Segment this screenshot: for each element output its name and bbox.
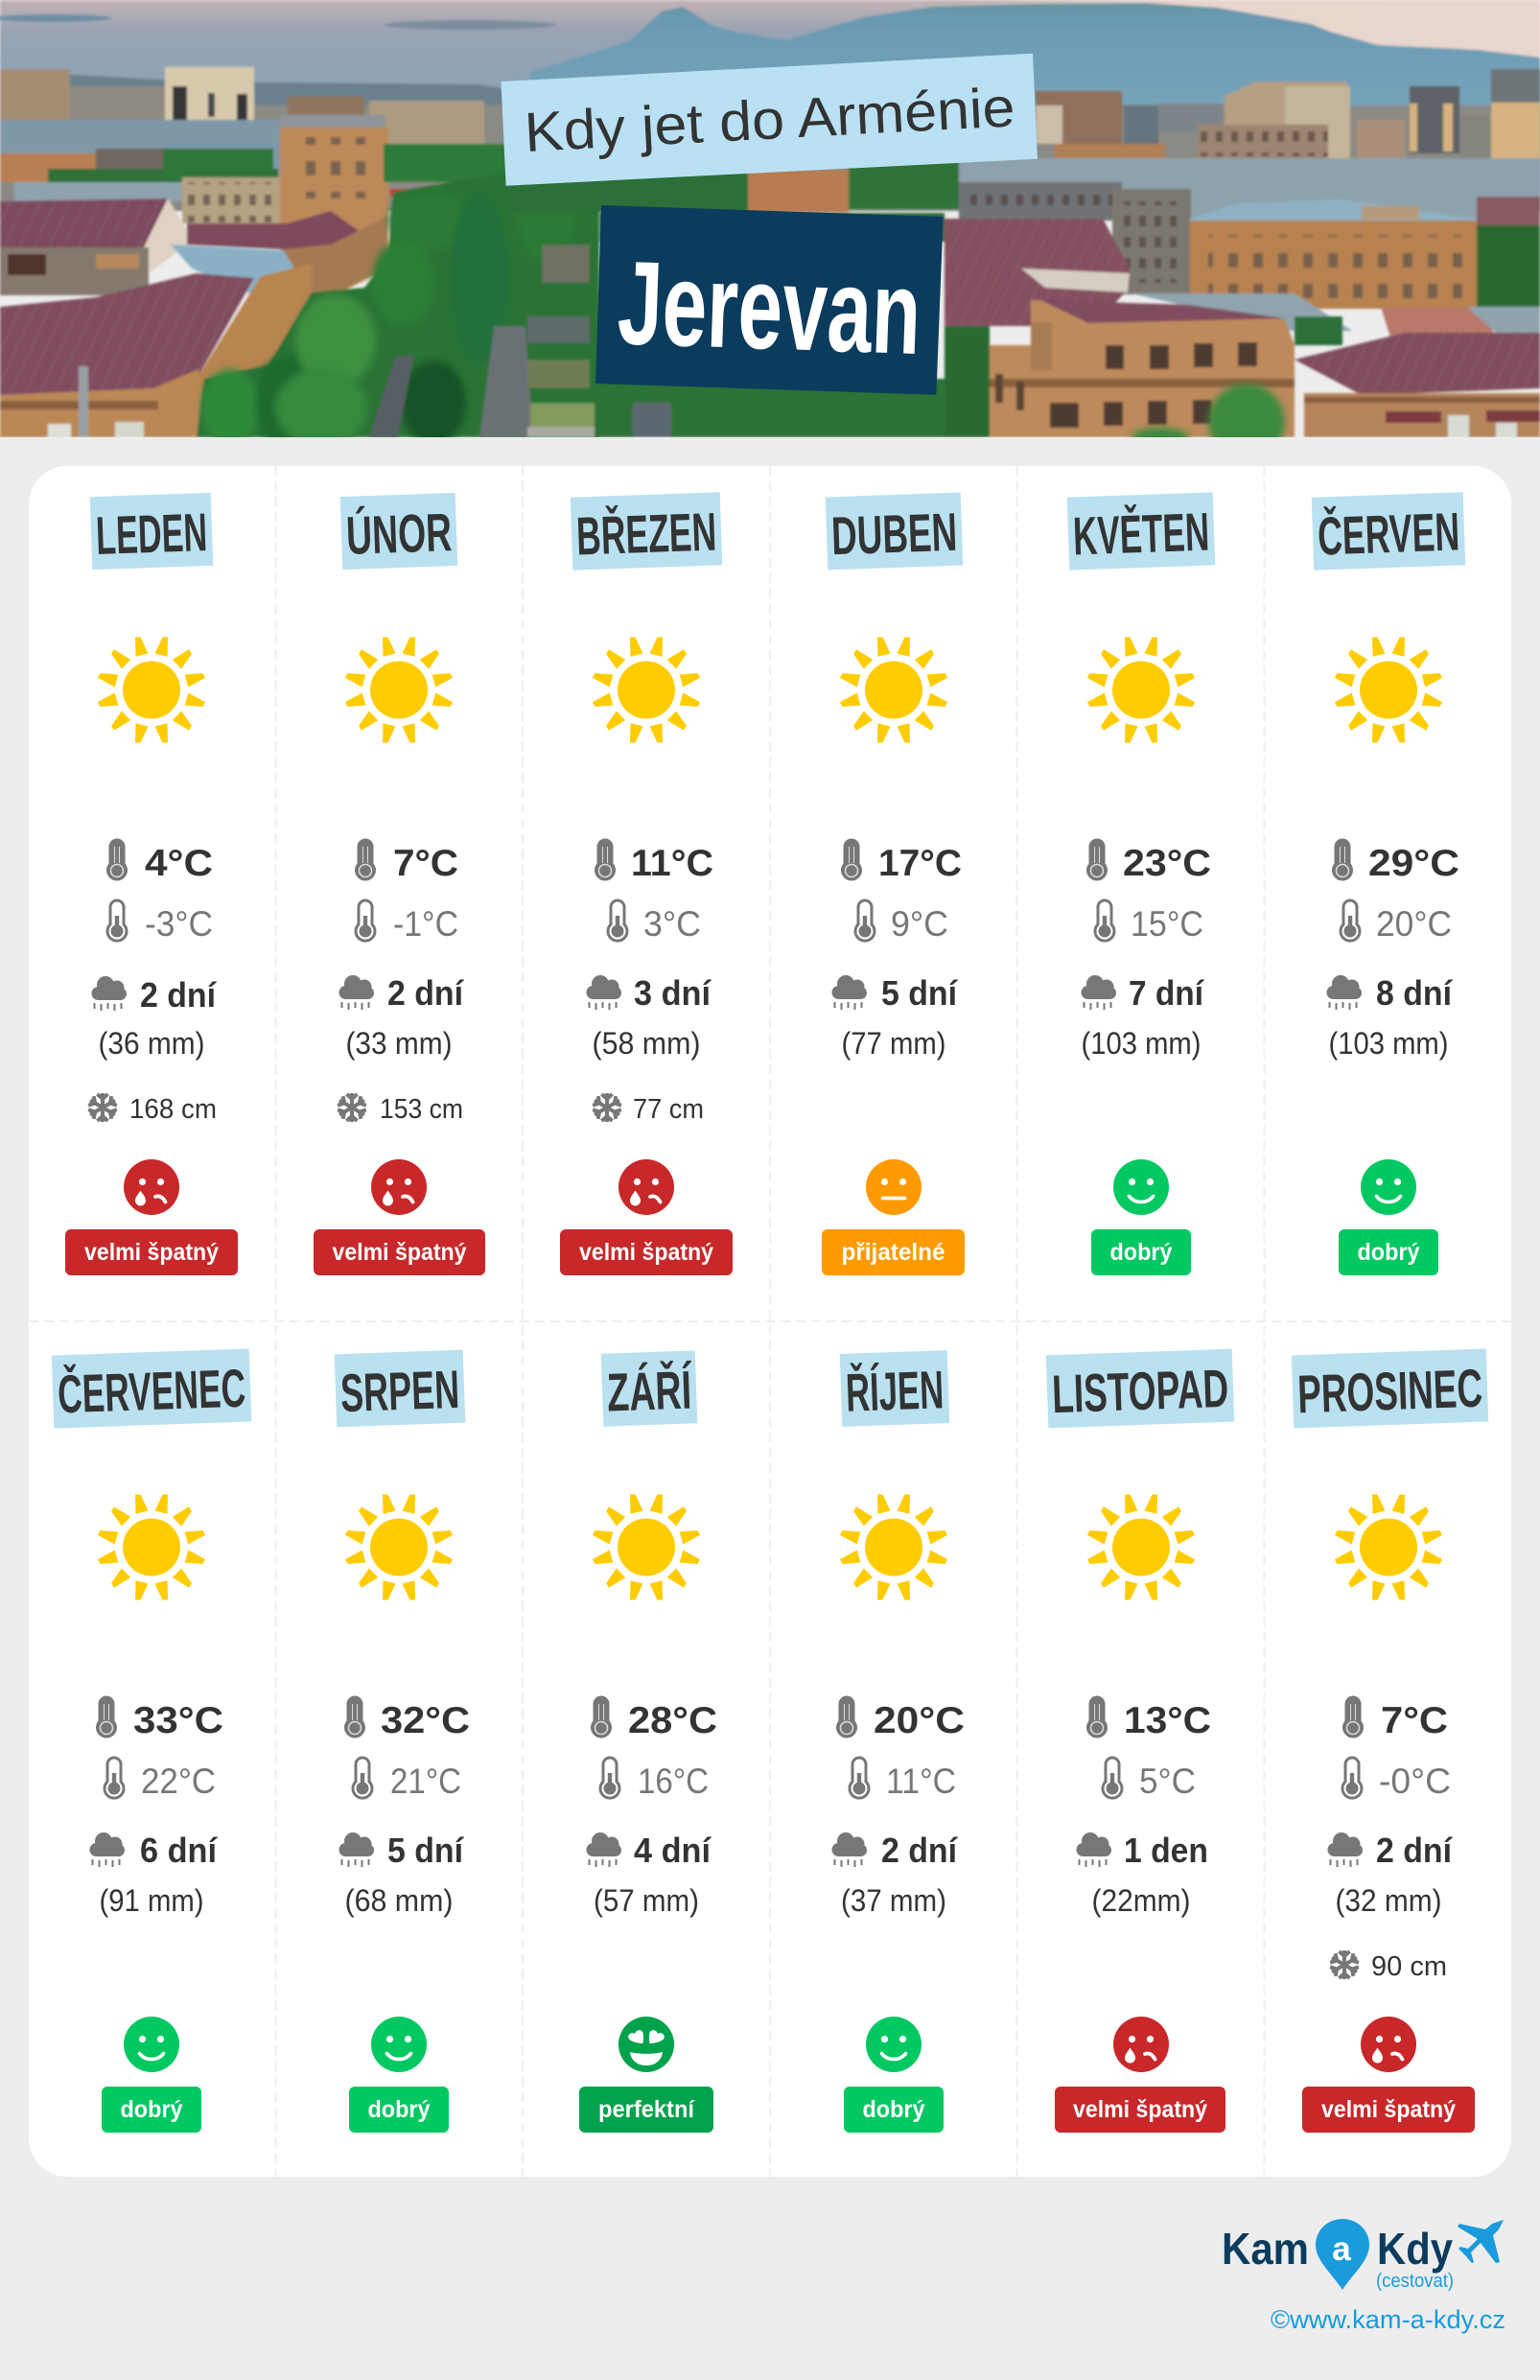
icon: rain cloud (1076, 1832, 1111, 1867)
rain days: 3 dní (634, 973, 712, 1013)
icon: thermometer high (96, 1695, 117, 1738)
rainfall: (103 mm) (1329, 1026, 1448, 1061)
rainfall: (22mm) (1091, 1883, 1191, 1918)
icon: thermometer low (600, 1758, 619, 1798)
rainfall: (57 mm) (594, 1883, 699, 1918)
second row of months (52, 1348, 1488, 2133)
rating face (866, 2017, 922, 2072)
icon: snowflake (592, 1093, 622, 1122)
rain days: 7 dní (1129, 973, 1204, 1013)
heading: LISTOPAD: LISTOPAD (1051, 1358, 1229, 1424)
rainfall: (91 mm) (100, 1883, 203, 1918)
icon: thermometer low (353, 1758, 372, 1798)
rating badge (560, 1229, 733, 1275)
rating badge: přijatelné (842, 1239, 945, 1266)
rating badge (65, 1229, 238, 1275)
month: Únor (314, 493, 485, 1275)
icon: thermometer low (1103, 1758, 1122, 1798)
heading: ÚNOR (340, 493, 457, 570)
rating face (124, 1159, 179, 1215)
low temperature: 16°C (638, 1762, 709, 1801)
month: Listopad (1046, 1349, 1234, 2133)
rain days: 2 dní (1376, 1831, 1453, 1870)
heading: KVĚTEN: KVĚTEN (1072, 502, 1210, 566)
icon: thermometer low (1341, 900, 1360, 941)
heading: DUBEN (826, 493, 963, 570)
icon: rain cloud (1327, 975, 1362, 1010)
icon: thermometer low (105, 1758, 124, 1798)
low temperature: -1°C (393, 904, 458, 944)
icon: sun (98, 637, 205, 742)
rating badge: velmi špatný (1321, 2096, 1456, 2123)
icon: sun (345, 637, 453, 742)
rating badge (1302, 2087, 1475, 2133)
rain days: 1 den (1124, 1831, 1208, 1870)
rating badge: dobrý (121, 2096, 183, 2123)
icon: rain cloud (832, 1832, 867, 1867)
heading: DUBEN: DUBEN (830, 502, 958, 566)
city label: Jerevan (595, 205, 944, 395)
low temperature: -3°C (145, 904, 213, 944)
month: Září (579, 1350, 717, 2133)
heading: ÚNOR: ÚNOR (345, 502, 453, 566)
rating face (1361, 1159, 1416, 1215)
icon: rain cloud (339, 1832, 374, 1867)
rain days: 2 dní (387, 973, 464, 1013)
high temperature: 11°C (631, 843, 713, 884)
month: Květen (1067, 492, 1215, 1275)
icon: thermometer low (356, 900, 375, 941)
high temperature: 7°C (393, 843, 458, 884)
icon: sun (1335, 637, 1442, 742)
rain days: 6 dní (140, 1831, 218, 1870)
rating badge (1055, 2087, 1225, 2133)
rating face (618, 2017, 674, 2072)
rating badge (314, 1229, 485, 1275)
low temperature: 11°C (886, 1762, 956, 1801)
heading: LEDEN: LEDEN (95, 502, 208, 566)
rating badge (102, 2087, 201, 2133)
icon: rain cloud (90, 1832, 125, 1867)
icon: rain cloud (92, 976, 127, 1011)
icon: sun (1335, 1494, 1442, 1599)
low temperature: 15°C (1131, 904, 1203, 944)
icon: rain cloud (1082, 975, 1116, 1010)
low temperature: 20°C (1376, 904, 1452, 944)
heading: ČERVENEC (52, 1348, 251, 1429)
city label: Jerevan: Jerevan (616, 237, 923, 380)
heading: LISTOPAD (1046, 1349, 1234, 1428)
heading: BŘEZEN: BŘEZEN (575, 501, 717, 567)
heading: ČERVENEC: ČERVENEC (57, 1358, 246, 1424)
icon: snowflake (1329, 1950, 1360, 1979)
rating badge: velmi špatný (1073, 2096, 1207, 2123)
rating badge (844, 2087, 944, 2133)
month: Prosinec (1292, 1348, 1488, 2133)
month: Březen (560, 492, 733, 1275)
logo: Kam a Kdy (1222, 2219, 1504, 2292)
low temperature: 5°C (1139, 1762, 1196, 1801)
icon: thermometer high (1332, 838, 1353, 880)
rain days: 2 dní (140, 975, 217, 1015)
rating badge: velmi špatný (84, 1239, 219, 1266)
month: Červenec (52, 1348, 251, 2133)
heading: ZÁŘÍ (601, 1350, 697, 1427)
icon: thermometer low (1342, 1758, 1362, 1798)
rating face (1361, 2017, 1416, 2072)
heading: ZÁŘÍ: ZÁŘÍ (606, 1359, 693, 1423)
high temperature: 32°C (381, 1700, 470, 1741)
high temperature: 23°C (1123, 843, 1211, 884)
rainfall: (36 mm) (98, 1026, 205, 1061)
icon: thermometer high (841, 838, 862, 880)
rain days: 2 dní (881, 1831, 958, 1870)
rating face (371, 1159, 427, 1215)
low temperature: 3°C (643, 904, 701, 944)
rating badge: dobrý (368, 2096, 431, 2123)
icon: thermometer high (836, 1695, 857, 1738)
title label: Kdy jet do Arménie (501, 54, 1038, 186)
rating badge: perfektní (598, 2096, 695, 2123)
high temperature: 7°C (1381, 1700, 1448, 1741)
icon: sun (840, 1494, 947, 1599)
heading: PROSINEC (1292, 1348, 1488, 1429)
rating badge (1339, 1229, 1438, 1275)
icon: sun (593, 637, 700, 742)
heading: ČERVEN (1312, 492, 1465, 571)
heading: SRPEN (335, 1350, 465, 1427)
icon: thermometer high (106, 838, 128, 880)
white card panel with monthly grid (29, 466, 1511, 2177)
high temperature: 29°C (1368, 843, 1459, 884)
title label: Kdy jet do Arménie: Kdy jet do Arménie (523, 76, 1016, 164)
icon: thermometer high (344, 1695, 365, 1738)
month: Srpen (335, 1350, 470, 2133)
logo subtitle: (cestovat) (1376, 2271, 1454, 2292)
icon: sun (593, 1494, 700, 1599)
high temperature: 33°C (133, 1700, 223, 1741)
rain days: 5 dní (387, 1831, 464, 1870)
rainfall: (58 mm) (593, 1026, 700, 1061)
icon: rain cloud (339, 975, 374, 1010)
icon: thermometer high (355, 838, 376, 880)
icon: snowflake (87, 1093, 118, 1122)
snowfall: 168 cm (129, 1094, 217, 1125)
icon: location pin with a (1316, 2219, 1369, 2290)
high temperature: 20°C (874, 1700, 965, 1741)
icon: thermometer high (595, 838, 616, 880)
rating badge: velmi špatný (332, 1239, 467, 1266)
rating face (866, 1159, 922, 1215)
icon: sun (1087, 637, 1195, 742)
rating face (1113, 2017, 1169, 2072)
rainfall: (33 mm) (345, 1026, 453, 1061)
low temperature: 22°C (141, 1762, 216, 1801)
month: Leden (65, 493, 238, 1275)
rating badge: dobrý (863, 2096, 925, 2123)
rating face (1113, 1159, 1169, 1215)
month: Říjen (832, 1350, 965, 2133)
low temperature: 9°C (891, 904, 948, 944)
icon: rain cloud (587, 1832, 621, 1867)
header photo: Yerevan cityscape with mountains (0, 0, 1540, 460)
icon: thermometer low (855, 900, 875, 941)
heading: SRPEN: SRPEN (339, 1359, 460, 1423)
icon: snowflake (337, 1093, 367, 1122)
icon: thermometer high (591, 1695, 612, 1738)
heading: LEDEN (90, 493, 213, 570)
rainfall: (68 mm) (345, 1883, 453, 1918)
icon: rain cloud (832, 975, 867, 1010)
high temperature: 28°C (628, 1700, 717, 1741)
heading: ŘÍJEN (840, 1350, 949, 1427)
heading: ŘÍJEN: ŘÍJEN (845, 1359, 945, 1423)
snowfall: 153 cm (380, 1094, 463, 1125)
icon: thermometer low (608, 900, 627, 941)
icon: thermometer high (1342, 1695, 1364, 1738)
icon: thermometer low (107, 900, 127, 941)
high temperature: 17°C (878, 843, 962, 884)
rainfall: (77 mm) (842, 1026, 945, 1061)
low temperature: -0°C (1379, 1762, 1451, 1801)
high temperature: 13°C (1124, 1700, 1211, 1741)
low temperature: 21°C (390, 1762, 461, 1801)
rating badge (349, 2087, 449, 2133)
rating badge (579, 2087, 713, 2133)
logo wordmark Kam: Kam (1222, 2224, 1309, 2274)
website credit: ©www.kam-a-kdy.cz (1271, 2305, 1505, 2334)
rainfall: (37 mm) (841, 1883, 946, 1918)
rain days: 5 dní (881, 973, 958, 1013)
rating face (371, 2017, 427, 2072)
icon: sun (1087, 1494, 1195, 1599)
month: Červen (1312, 492, 1465, 1275)
rain days: 8 dní (1376, 973, 1453, 1013)
icon: sun (98, 1494, 205, 1599)
icon: thermometer low (850, 1758, 869, 1798)
rating badge (822, 1229, 965, 1275)
high temperature: 4°C (145, 843, 213, 884)
rating badge: dobrý (1358, 1239, 1420, 1266)
rating face (618, 1159, 674, 1215)
heading: BŘEZEN (571, 492, 722, 571)
icon: thermometer low (1095, 900, 1114, 941)
heading: KVĚTEN (1067, 492, 1215, 571)
rating badge: dobrý (1110, 1239, 1173, 1266)
icon: location pin with a: a (1332, 2230, 1351, 2268)
heading: ČERVEN: ČERVEN (1317, 501, 1460, 567)
month: Duben (822, 493, 965, 1275)
rating badge (1091, 1229, 1191, 1275)
snowfall: 90 cm (1371, 1951, 1447, 1982)
icon: thermometer high (1086, 1695, 1108, 1738)
rainfall: (32 mm) (1335, 1883, 1442, 1918)
rating face (124, 2017, 179, 2072)
icon: rain cloud (587, 975, 621, 1010)
icon: sun (345, 1494, 453, 1599)
rainfall: (103 mm) (1082, 1026, 1201, 1061)
snowfall: 77 cm (633, 1094, 704, 1125)
icon: airplane (1458, 2220, 1504, 2263)
icon: thermometer high (1086, 838, 1108, 880)
icon: sun (840, 637, 947, 742)
rain days: 4 dní (634, 1831, 712, 1870)
icon: rain cloud (1327, 1832, 1363, 1867)
rating badge: velmi špatný (579, 1239, 713, 1266)
logo wordmark Kdy: Kdy (1377, 2224, 1453, 2274)
